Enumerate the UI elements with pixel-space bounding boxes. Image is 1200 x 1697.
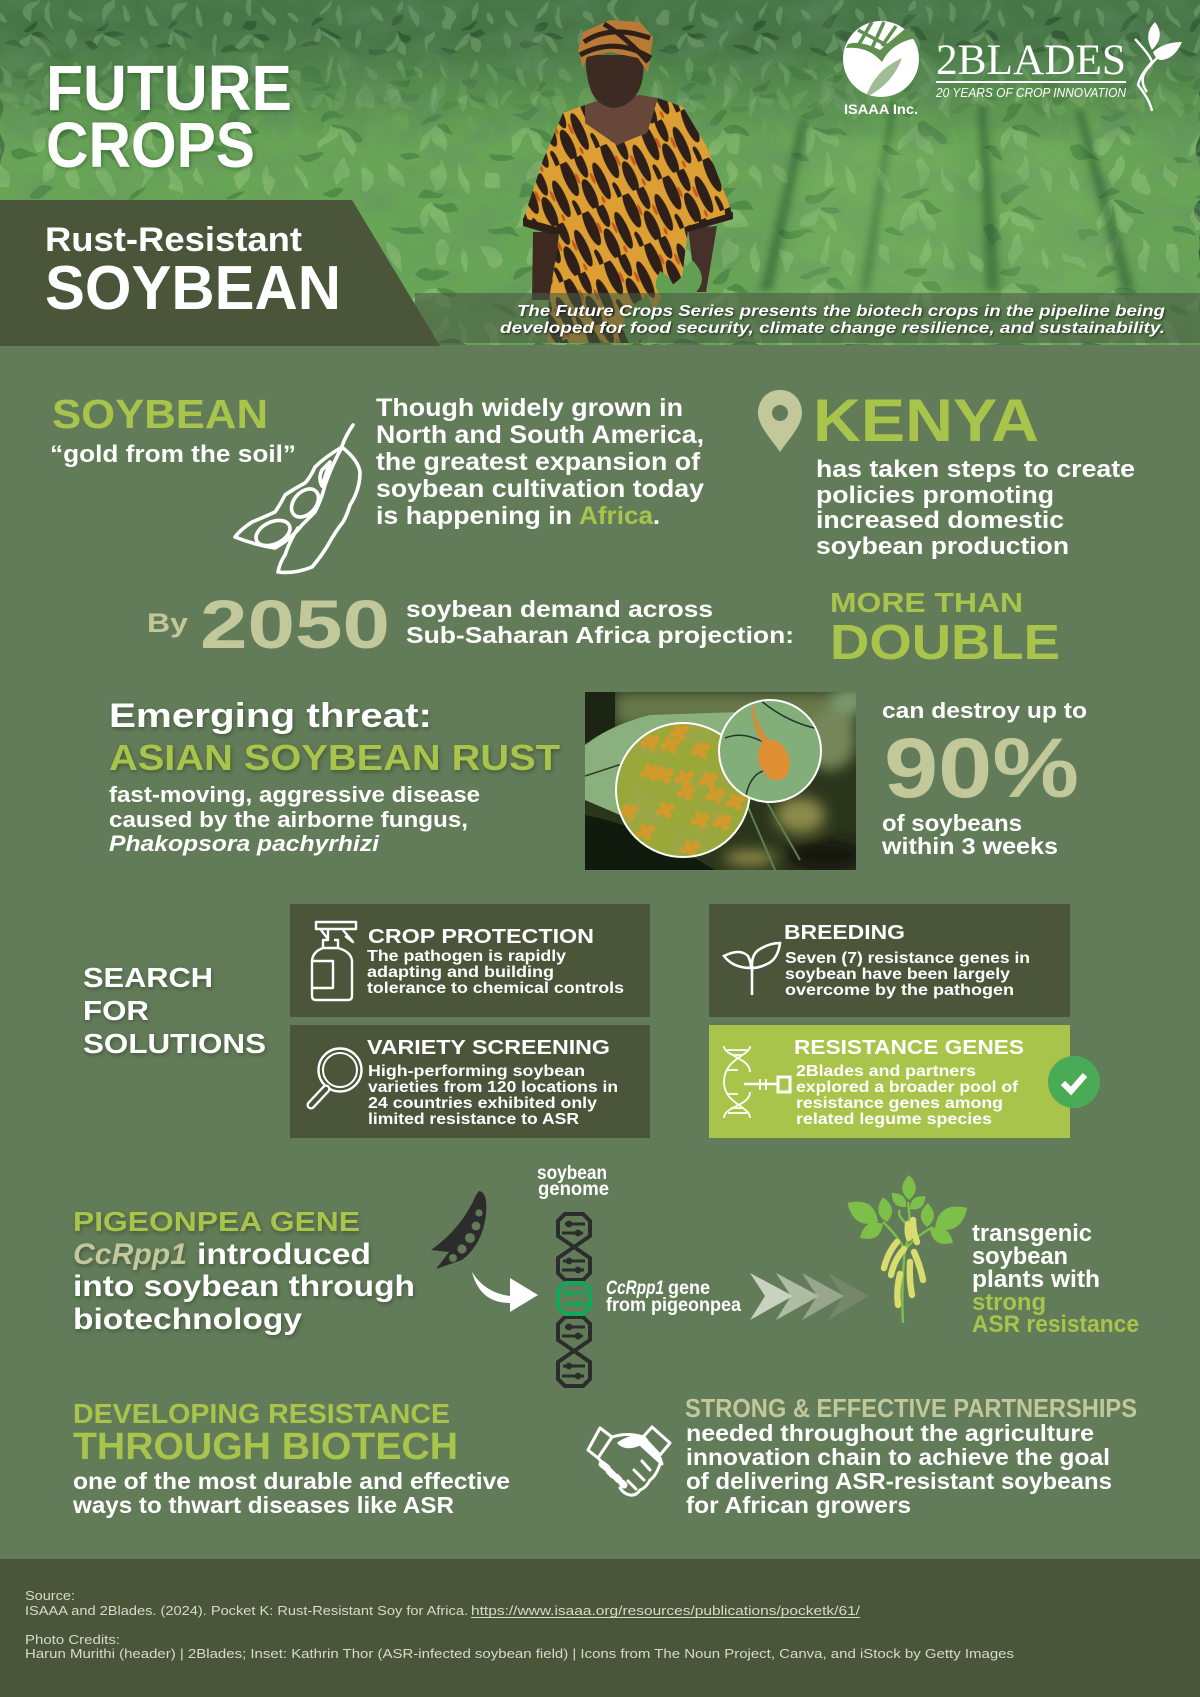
caption strip xyxy=(415,293,1200,343)
title banner: Rust-Resistant Soybean xyxy=(0,200,440,346)
caption text xyxy=(500,303,1166,337)
panel: variety screening: VARIETY SCREENING xyxy=(367,1036,610,1059)
panel: variety screening: varieties from 120 locations in xyxy=(368,1079,618,1096)
photo: rust infected leaf with insets xyxy=(585,686,870,871)
paragraph: Kenya policies: increased domestic xyxy=(816,507,1064,534)
panel: variety screening: limited resistance to ASR xyxy=(368,1111,579,1128)
block: developing resistance through biotech xyxy=(72,1398,510,1518)
paragraph: soybean expansion: is happening in xyxy=(376,502,572,530)
block: strong and effective partnerships: STRONG & EFFECTIVE PARTNERSHIPS xyxy=(685,1393,1137,1423)
block: strong and effective partnerships: innovation chain to achieve the goal xyxy=(686,1444,1110,1470)
icon: magnifier xyxy=(311,1048,362,1105)
paragraph: soybean expansion: soybean cultivation today xyxy=(376,475,704,503)
footer: sources and credits: Source: xyxy=(25,1588,75,1603)
heading: pigeonpea gene: introduced xyxy=(197,1238,371,1271)
heading: pigeonpea gene xyxy=(73,1206,415,1336)
logo: 2Blades: 20 YEARS OF CROP INNOVATION xyxy=(935,85,1127,100)
text: rust description xyxy=(109,782,480,856)
stat: by 2050: By xyxy=(147,608,188,638)
dress xyxy=(523,98,733,343)
stat: by 2050: 2050 xyxy=(200,586,390,663)
footer: sources and credits xyxy=(0,1559,1200,1697)
heading: pigeonpea gene: biotechnology xyxy=(73,1303,302,1336)
panel: breeding: BREEDING xyxy=(784,922,905,944)
text: soybean demand xyxy=(406,596,794,648)
label: soybean genome: soybean xyxy=(537,1163,607,1184)
panel: breeding: overcome by the pathogen xyxy=(785,982,1014,999)
block: strong and effective partnerships xyxy=(685,1393,1137,1518)
footer: sources and credits: https://www.isaaa.org/resources/publications/pocketk/61/ xyxy=(471,1603,860,1618)
panel: breeding: soybean have been largely xyxy=(785,966,1010,983)
label: CcRpp1 gene from pigeonpea: from pigeonpea xyxy=(606,1295,741,1316)
heading: search for solutions xyxy=(83,962,266,1059)
text: transgenic soybean: plants with xyxy=(972,1266,1100,1293)
paragraph: soybean expansion: Africa xyxy=(579,502,654,530)
text: soybean demand: Sub-Saharan Africa projection: xyxy=(406,622,794,648)
panel: resistance genes: RESISTANCE GENES xyxy=(794,1036,1024,1059)
panel: resistance genes: explored a broader pool of xyxy=(796,1079,1019,1096)
logo: 2Blades xyxy=(935,22,1182,111)
text: transgenic soybean xyxy=(972,1220,1139,1338)
heading: pigeonpea gene: PIGEONPEA GENE xyxy=(73,1206,360,1237)
heading: search for solutions: SEARCH xyxy=(83,962,213,993)
paragraph: Kenya policies xyxy=(816,456,1135,560)
title banner: Rust-Resistant Soybean: SOYBEAN xyxy=(45,254,341,323)
stat: 90 percent: of soybeans xyxy=(882,810,1022,836)
stat: more than double: MORE THAN xyxy=(830,587,1023,618)
text: rust description: Phakopsora pachyrhizi xyxy=(109,831,380,856)
text: transgenic soybean: ASR resistance xyxy=(972,1311,1139,1338)
heading: Soybean: “gold from the soil” xyxy=(50,441,296,468)
stat: 90 percent xyxy=(881,698,1087,859)
heading: emerging threat: Emerging threat: xyxy=(109,697,432,735)
panel: resistance genes: resistance genes among xyxy=(796,1095,1003,1112)
text: rust description: caused by the airborne fungus, xyxy=(109,807,468,832)
icon: soybean pod xyxy=(235,425,360,572)
icon: location pin xyxy=(758,390,802,452)
paragraph: Kenya policies: has taken steps to create xyxy=(816,456,1135,483)
panel: resistance genes: 2Blades and partners xyxy=(796,1063,976,1080)
heading: emerging threat xyxy=(109,697,560,778)
panel: breeding xyxy=(709,904,1070,1017)
block: strong and effective partnerships: for African growers xyxy=(686,1492,911,1518)
label: CcRpp1 gene from pigeonpea: gene xyxy=(668,1278,710,1299)
panel: crop protection: adapting and building xyxy=(367,964,554,981)
title: Future Crops xyxy=(46,52,292,181)
paragraph: soybean expansion: North and South America, xyxy=(376,421,704,449)
icon: handshake xyxy=(588,1427,670,1495)
icon: spray bottle xyxy=(312,922,356,1000)
stat: by 2050 xyxy=(147,586,390,663)
panel: variety screening: 24 countries exhibited only xyxy=(368,1095,597,1112)
heading: pigeonpea gene: CcRpp1 xyxy=(73,1238,187,1271)
icon: dark pigeonpea pod xyxy=(431,1191,486,1269)
paragraph: Kenya policies: policies promoting xyxy=(816,482,1054,509)
caption text: The Future Crops Series presents the biotech crops in the pipeline being xyxy=(517,303,1166,320)
icon: DNA and syringe xyxy=(724,1046,790,1118)
logo: ISAAA xyxy=(843,21,919,117)
label: CcRpp1 gene from pigeonpea: CcRpp1 xyxy=(606,1278,664,1299)
paragraph: soybean expansion: Though widely grown in xyxy=(376,394,683,422)
panel: crop protection: CROP PROTECTION xyxy=(368,925,594,948)
heading: Soybean xyxy=(50,391,296,468)
heading: Kenya: KENYA xyxy=(813,387,1039,454)
head wrap xyxy=(578,20,653,73)
text: soybean demand: soybean demand across xyxy=(406,596,713,622)
title: Future Crops: FUTURE xyxy=(46,52,292,124)
stat: 90 percent: can destroy up to xyxy=(882,698,1087,723)
footer: sources and credits: ISAAA and 2Blades. (2024). Pocket K: Rust-Resistant Soy for Africa. xyxy=(25,1603,468,1618)
icon: sprout xyxy=(724,943,780,995)
label: soybean genome: genome xyxy=(538,1179,609,1200)
heading: search for solutions: SOLUTIONS xyxy=(83,1028,266,1059)
block: developing resistance through biotech: THROUGH BIOTECH xyxy=(73,1426,458,1468)
foreground leaves xyxy=(617,260,726,350)
farmer figure xyxy=(523,20,733,350)
caption text: developed for food security, climate change resilience, and sustainability. xyxy=(500,320,1165,337)
block: strong and effective partnerships: of delivering ASR-resistant soybeans xyxy=(686,1468,1112,1494)
title: Future Crops: CROPS xyxy=(46,109,255,181)
heading: search for solutions: FOR xyxy=(83,995,149,1026)
title banner: Rust-Resistant Soybean: Rust-Resistant xyxy=(45,221,302,259)
footer: sources and credits: Photo Credits: xyxy=(25,1632,120,1647)
neck and chest xyxy=(585,95,658,145)
paragraph: soybean expansion: the greatest expansion of xyxy=(376,448,701,476)
block: developing resistance through biotech: ways to thwart diseases like ASR xyxy=(72,1492,454,1518)
text: rust description: fast-moving, aggressive disease xyxy=(109,782,480,807)
stat: more than double: DOUBLE xyxy=(830,616,1060,670)
block: strong and effective partnerships: needed throughout the agriculture xyxy=(686,1420,1094,1446)
paragraph: Kenya policies: soybean production xyxy=(816,533,1069,560)
heading: emerging threat: ASIAN SOYBEAN RUST xyxy=(109,737,560,778)
stat: more than double xyxy=(830,587,1060,670)
text: transgenic soybean: soybean xyxy=(972,1243,1068,1270)
heading: pigeonpea gene: into soybean through xyxy=(73,1270,415,1303)
panel: crop protection: tolerance to chemical controls xyxy=(367,980,624,997)
block: developing resistance through biotech: DEVELOPING RESISTANCE xyxy=(73,1398,450,1429)
panel: variety screening xyxy=(290,1025,650,1138)
icon: transgenic soybean plant xyxy=(842,1175,973,1323)
block: developing resistance through biotech: one of the most durable and effective xyxy=(73,1468,510,1494)
diagram: DNA strand with inserted gene xyxy=(558,1214,590,1386)
paragraph: soybean expansion xyxy=(376,394,704,530)
text: transgenic soybean: strong xyxy=(972,1289,1046,1316)
logo: ISAAA: ISAAA Inc. xyxy=(844,102,918,117)
panel: resistance genes xyxy=(709,1025,1100,1138)
arrows: chevrons to plant xyxy=(750,1273,869,1320)
arrow: into genome xyxy=(472,1272,538,1312)
footer: sources and credits: Harun Murithi (header) | 2Blades; Inset: Kathrin Thor (ASR-infected soybean field) | Icons from The Noun Project, Canva, and iStock by Getty Images xyxy=(25,1646,1015,1661)
face xyxy=(586,55,644,108)
text: transgenic soybean: transgenic xyxy=(972,1220,1092,1247)
logo: 2Blades: 2BLADES xyxy=(936,37,1126,84)
icon: check badge xyxy=(1048,1056,1100,1108)
label: soybean genome xyxy=(537,1163,609,1200)
paragraph: soybean expansion: . xyxy=(653,502,660,530)
arms xyxy=(532,232,559,300)
header photo: soybean field xyxy=(0,0,1200,345)
panel: variety screening: High-performing soybean xyxy=(368,1063,585,1080)
panel: breeding: Seven (7) resistance genes in xyxy=(785,950,1030,967)
panel: crop protection xyxy=(290,904,650,1017)
stat: 90 percent: 90% xyxy=(884,721,1079,815)
heading: Soybean: SOYBEAN xyxy=(52,391,268,437)
panel: crop protection: The pathogen is rapidly xyxy=(367,948,566,965)
label: CcRpp1 gene from pigeonpea xyxy=(606,1278,741,1316)
stat: 90 percent: within 3 weeks xyxy=(881,833,1058,859)
panel: resistance genes: related legume species xyxy=(796,1111,992,1128)
